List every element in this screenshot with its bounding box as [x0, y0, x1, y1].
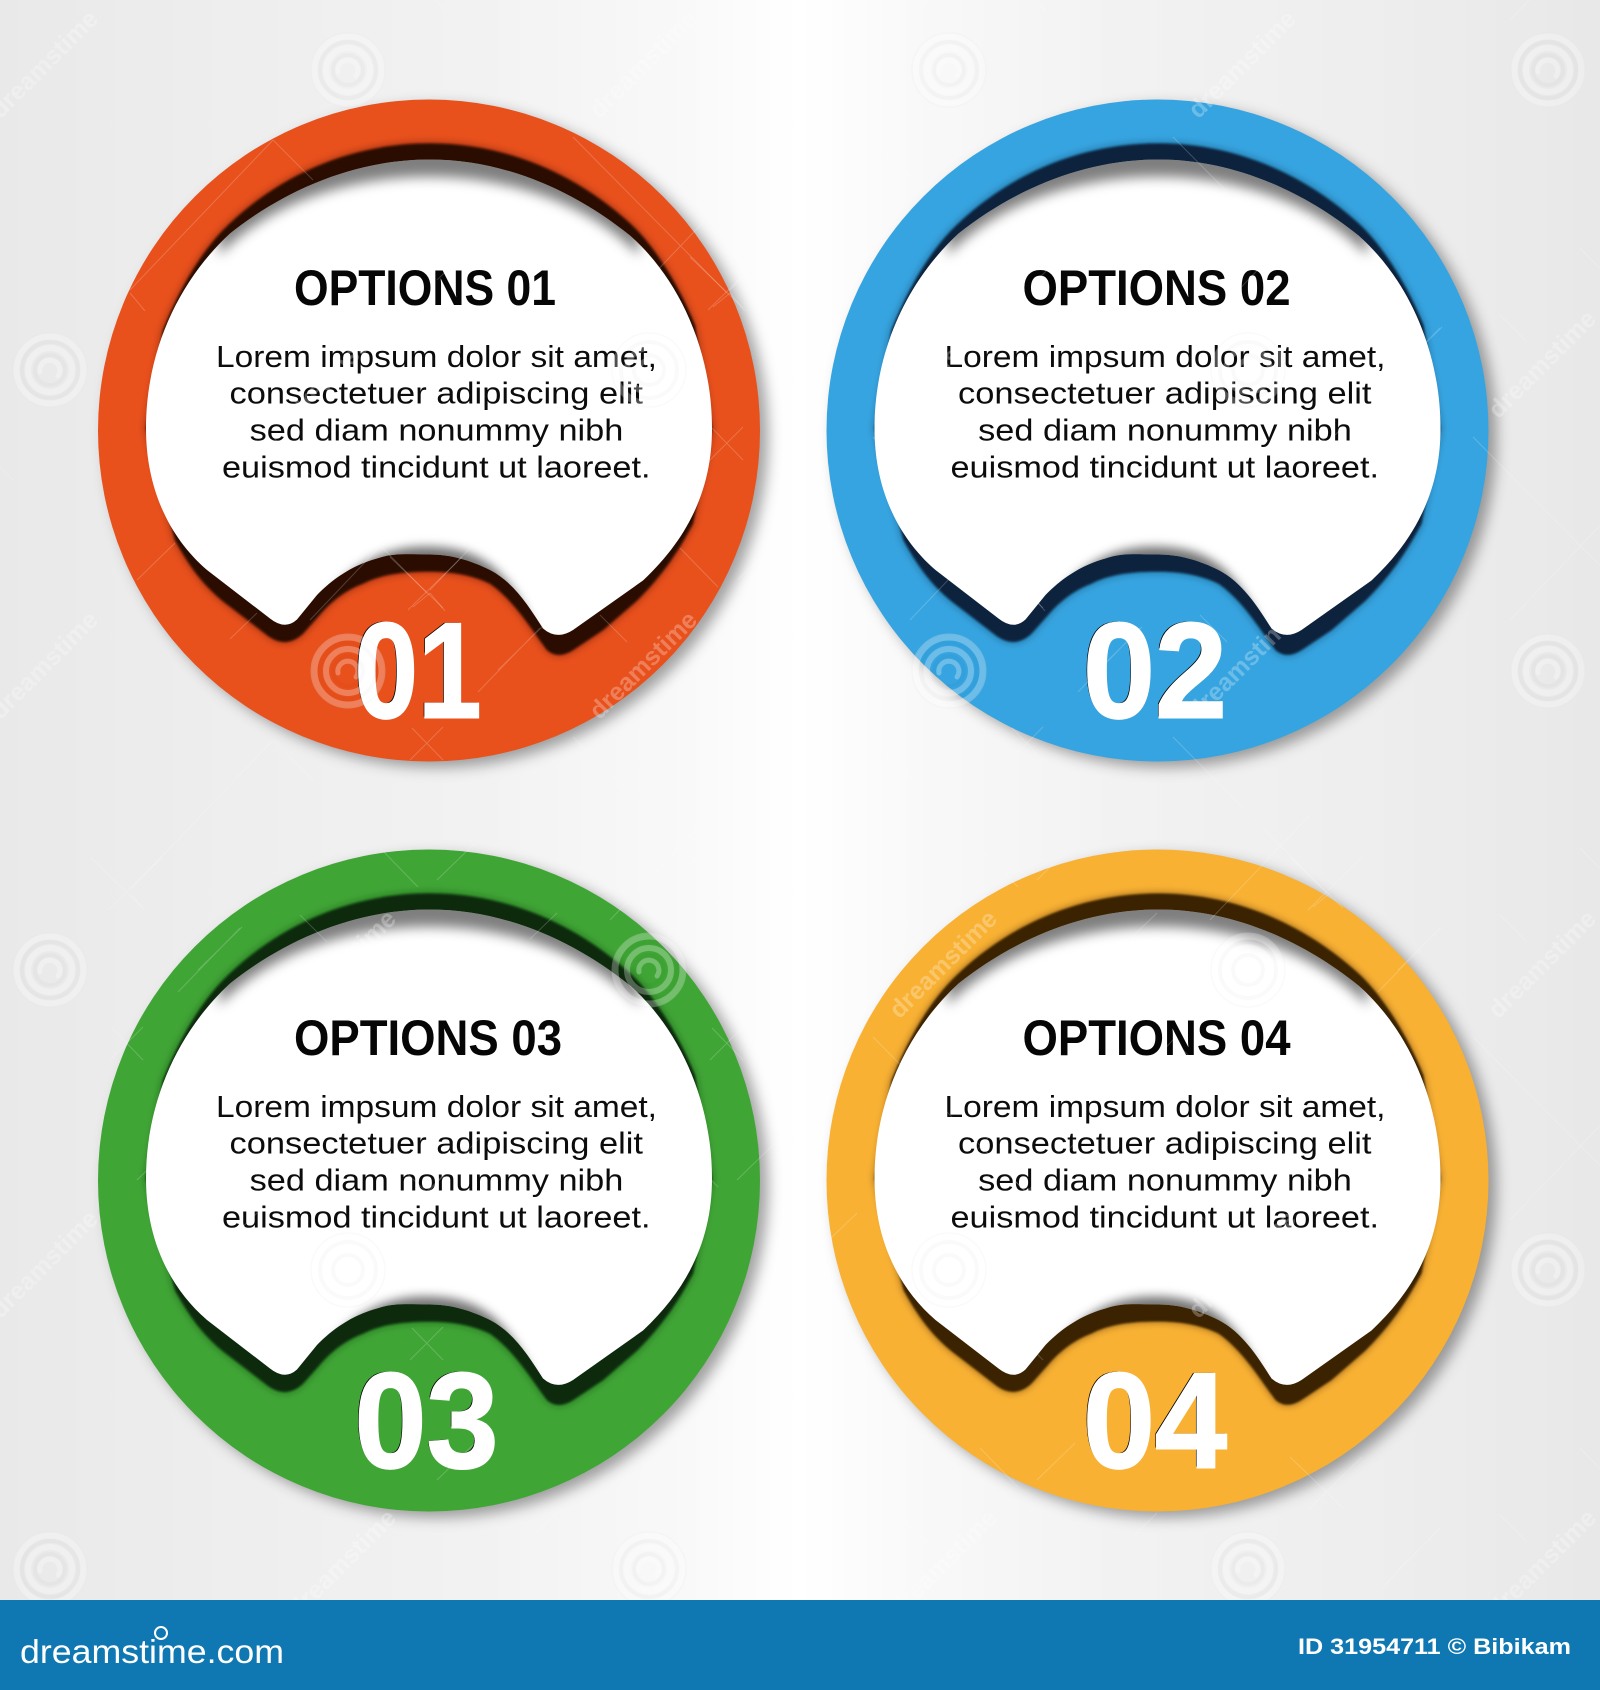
- card shade: [219, 860, 639, 1396]
- number: 04: [1083, 1344, 1227, 1496]
- white text card: [874, 160, 1440, 635]
- body text: [216, 1089, 657, 1234]
- heading: OPTIONS 01: [294, 260, 556, 316]
- watermark text: dreamstime: [1183, 1205, 1302, 1324]
- number: 03: [353, 1344, 497, 1496]
- watermark text: dreamstime: [584, 1205, 703, 1324]
- watermark text: dreamstime: [1183, 606, 1302, 725]
- panel: options 01: [98, 100, 768, 768]
- footer credit: ID 31954711 © Bibikam: [1298, 1634, 1571, 1659]
- ring shadow: [834, 106, 1496, 768]
- card shade: [219, 110, 639, 646]
- body text: [944, 339, 1386, 484]
- watermark text: dreamstime: [1183, 5, 1302, 124]
- body text: euismod tincidunt ut laoreet.: [950, 449, 1379, 484]
- body text: consectetuer adipiscing elit: [230, 1126, 643, 1161]
- watermark text: dreamstime: [884, 305, 1003, 424]
- watermark text: dreamstime: [283, 305, 402, 424]
- body text: euismod tincidunt ut laoreet.: [950, 1199, 1379, 1234]
- heading: OPTIONS 03: [294, 1010, 562, 1066]
- watermark text: dreamstime: [884, 1504, 1003, 1623]
- blue ring: [826, 100, 1488, 762]
- watermark text: dreamstime: [283, 1504, 402, 1623]
- heading: OPTIONS 02: [1022, 260, 1290, 316]
- footer logo: dreamstime.com: [20, 1633, 284, 1670]
- number: 03: [354, 1344, 498, 1496]
- number: 02: [1082, 594, 1226, 746]
- body text: Lorem impsum dolor sit amet,: [944, 1089, 1386, 1124]
- body text: euismod tincidunt ut laoreet.: [222, 449, 651, 484]
- body text: sed diam nonummy nibh: [978, 413, 1352, 448]
- white text card: [146, 910, 712, 1385]
- watermark text: dreamstime: [1483, 1504, 1600, 1623]
- watermark text: dreamstime: [283, 905, 402, 1024]
- body text: sed diam nonummy nibh: [250, 413, 623, 448]
- body text: consectetuer adipiscing elit: [958, 376, 1372, 411]
- watermark text: dreamstime: [1483, 305, 1600, 424]
- body text: [216, 339, 657, 484]
- panel: options 04: [826, 850, 1496, 1518]
- ring shadow: [106, 856, 768, 1518]
- heading: OPTIONS 04: [1022, 1010, 1291, 1066]
- cut-out edge: [146, 144, 712, 655]
- orange ring: [98, 100, 760, 762]
- body text: Lorem impsum dolor sit amet,: [944, 339, 1386, 374]
- panel: options 02: [826, 100, 1496, 768]
- footer bar: [0, 1600, 1600, 1690]
- panel: options 03: [98, 850, 768, 1518]
- body text: consectetuer adipiscing elit: [958, 1126, 1372, 1161]
- cut-out edge: [874, 894, 1440, 1405]
- number: 01: [353, 594, 480, 746]
- ring shadow: [106, 106, 768, 768]
- watermark text: dreamstime: [584, 606, 703, 725]
- watermark text: dreamstime: [884, 905, 1003, 1024]
- number: 04: [1082, 1344, 1226, 1496]
- card shade: [948, 110, 1368, 646]
- white text card: [874, 910, 1440, 1385]
- body text: Lorem impsum dolor sit amet,: [216, 1089, 657, 1124]
- body text: consectetuer adipiscing elit: [230, 376, 643, 411]
- cut-out edge: [874, 144, 1440, 655]
- body text: sed diam nonummy nibh: [250, 1163, 623, 1198]
- ring shadow: [834, 856, 1496, 1518]
- number: 01: [354, 594, 482, 746]
- watermark text: dreamstime: [584, 5, 703, 124]
- card shade: [948, 860, 1368, 1396]
- body text: euismod tincidunt ut laoreet.: [222, 1199, 651, 1234]
- yellow ring: [826, 850, 1488, 1512]
- watermark text: dreamstime: [1483, 905, 1600, 1024]
- body text: Lorem impsum dolor sit amet,: [216, 339, 657, 374]
- green ring: [98, 850, 760, 1512]
- white text card: [146, 160, 712, 635]
- cut-out edge: [146, 894, 712, 1405]
- body text: sed diam nonummy nibh: [978, 1163, 1352, 1198]
- number: 02: [1083, 594, 1227, 746]
- body text: [944, 1089, 1386, 1234]
